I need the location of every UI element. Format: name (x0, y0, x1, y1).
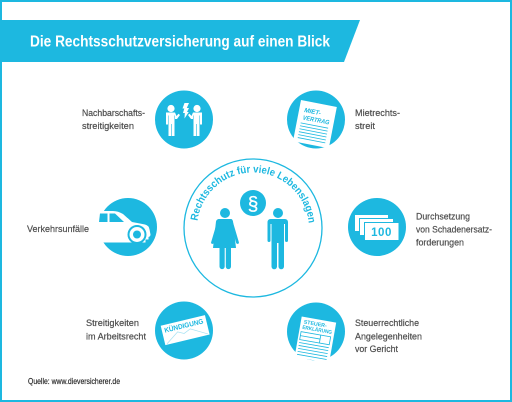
central circle: Rechtsschutz für viele Lebenslagen (183, 158, 323, 298)
icon: banknotes 100 (348, 198, 406, 256)
icon: tax return: ERKLÄRUNG (302, 324, 333, 336)
label: Steuerrechtliche Angelegenheiten vor Gericht: vor Gericht (355, 344, 398, 355)
label: Steuerrechtliche Angelegenheiten vor Gericht: Steuerrechtliche (355, 318, 419, 329)
label: Streitigkeiten im Arbeitsrecht: im Arbeitsrecht (86, 332, 146, 342)
icon: banknotes 100: 100 (371, 227, 392, 239)
label: Verkehrsunfälle: Verkehrsunfälle (27, 224, 89, 235)
label: Durchsetzung von Schadenersatzforderungen (416, 212, 492, 248)
icon: car (99, 198, 157, 256)
label: Durchsetzung von Schadenersatzforderungen: forderungen (416, 238, 464, 248)
label: Mietrechtsstreit: Mietrechts- (355, 108, 400, 119)
icon: dismissal letter: KÜNDIGUNG (163, 316, 205, 335)
arc heading: Rechtsschutz für viele Lebenslagen (190, 165, 314, 223)
label: Nachbarschaftsstreitigkeiten: Nachbarschafts- (82, 108, 145, 119)
icon: neighbours in dispute (155, 90, 213, 148)
icon: woman (212, 208, 238, 269)
icon: tax return (287, 302, 345, 363)
icon: tax return: STEUER- (303, 320, 327, 329)
label: Durchsetzung von Schadenersatzforderungen: Durchsetzung (416, 212, 470, 222)
title banner (0, 20, 360, 62)
label: Streitigkeiten im Arbeitsrecht: Streitigkeiten (86, 318, 139, 329)
icon: rental contract: MIET- (304, 107, 321, 117)
label: Nachbarschaftsstreitigkeiten: streitigkeiten (82, 121, 134, 132)
icon: paragraph sign: § (248, 194, 258, 215)
label: Steuerrechtliche Angelegenheiten vor Gericht: Angelegenheiten (355, 332, 422, 342)
icon: rental contract (287, 90, 345, 148)
title banner: Die Rechtsschutzversicherung auf einen Blick (30, 34, 330, 50)
label: Streitigkeiten im Arbeitsrecht (86, 318, 146, 342)
label: Nachbarschaftsstreitigkeiten (82, 108, 145, 132)
icon: man (268, 208, 288, 269)
icon: rental contract: VERTRAG (302, 115, 330, 127)
icon: dismissal letter (155, 302, 213, 360)
label: Steuerrechtliche Angelegenheiten vor Gericht (355, 318, 422, 355)
label: Mietrechtsstreit: streit (355, 121, 375, 132)
label: Mietrechtsstreit (355, 108, 400, 132)
label: Durchsetzung von Schadenersatzforderungen: von Schadenersatz- (416, 224, 492, 236)
source note: Quelle: www.dieversicherer.de (28, 377, 120, 386)
